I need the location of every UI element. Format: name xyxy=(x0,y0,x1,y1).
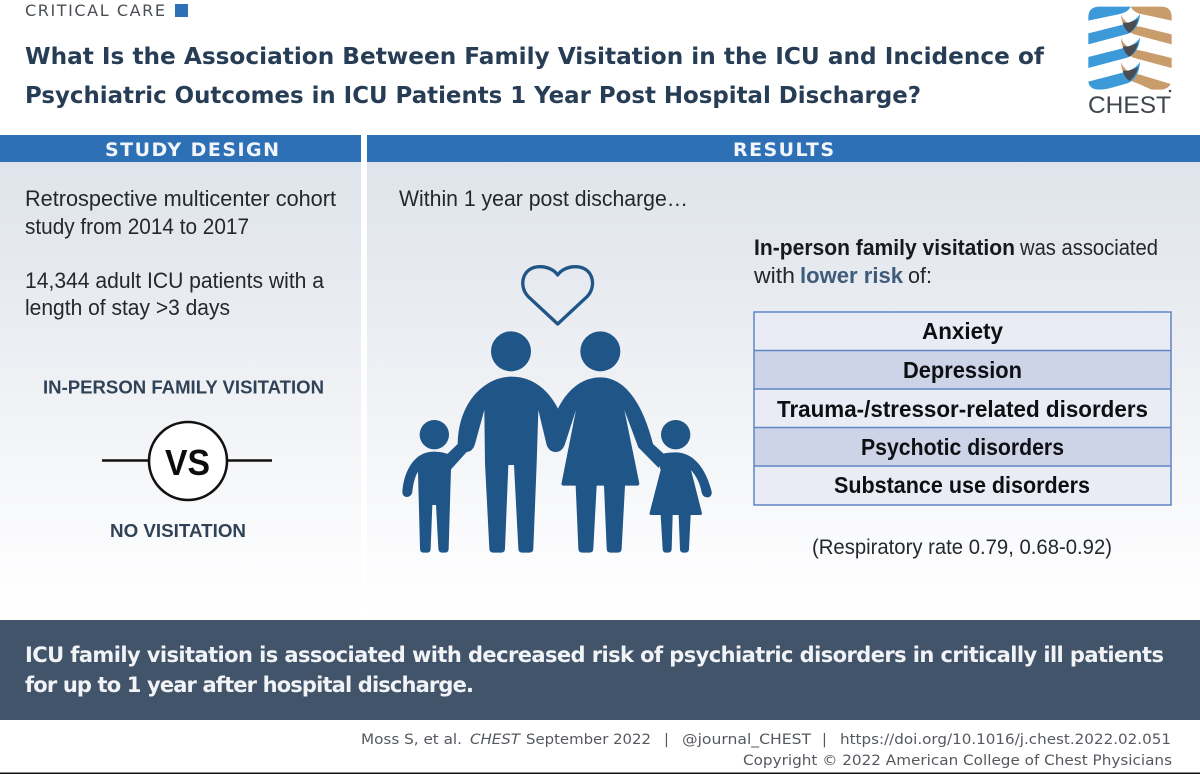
text: respiratory rate: (Respiratory rate 0.79, 0.68-0.92) xyxy=(812,536,1112,559)
text block: patients: 14,344 adult ICU patients with a xyxy=(25,268,325,293)
footer: citation: Moss S, et al. xyxy=(361,732,462,748)
text block: study type: Retrospective multicenter cohort xyxy=(25,186,336,211)
title: What Is the Association Between Family Visitation in the ICU and Incidence of xyxy=(25,42,1045,70)
icon: versus circle xyxy=(102,422,272,500)
text: within 1 year: Within 1 year post discharge… xyxy=(399,186,688,211)
footer: citation: | xyxy=(822,732,827,748)
icon: heart xyxy=(523,267,593,324)
icon: man and woman xyxy=(447,331,664,553)
icon: family with heart xyxy=(402,267,712,553)
icon: boy xyxy=(402,420,451,553)
footer: citation: @journal_CHEST xyxy=(682,732,811,748)
callout: conclusion: for up to 1 year after hospital discharge. xyxy=(25,673,474,697)
table: psychiatric outcomes: Substance use disorders xyxy=(834,472,1090,498)
text block: patients: length of stay >3 days xyxy=(25,295,230,320)
footer: citation: September 2022 xyxy=(526,732,651,748)
icon: versus circle: VS xyxy=(165,442,210,483)
callout: conclusion: ICU family visitation is associated with decreased risk of psychiatric disorders in critically ill patients xyxy=(25,643,1164,667)
icon: girl xyxy=(650,420,712,553)
panel: study design xyxy=(0,135,361,620)
text block: patients xyxy=(25,268,325,320)
text block: study type xyxy=(25,186,336,239)
footer: citation: | xyxy=(664,732,669,748)
heading: results: RESULTS xyxy=(733,139,834,161)
panel: results xyxy=(367,135,1200,620)
heading: study design xyxy=(0,135,361,162)
footer: citation xyxy=(361,732,1172,769)
label: in-person family visitation: IN-PERSON FAMILY VISITATION xyxy=(43,378,324,398)
footer: citation: CHEST xyxy=(470,732,521,748)
text: lower risk statement: with xyxy=(753,263,795,288)
title: Psychiatric Outcomes in ICU Patients 1 Year Post Hospital Discharge? xyxy=(25,81,921,109)
footer: citation: https://doi.org/10.1016/j.chest.2022.02.051 xyxy=(840,732,1171,748)
icon: CHEST logo: CHEST xyxy=(1088,92,1171,119)
text block: study type: study from 2014 to 2017 xyxy=(25,214,249,239)
heading: study design: STUDY DESIGN xyxy=(105,139,279,161)
table: psychiatric outcomes: Trauma-/stressor-related disorders xyxy=(777,396,1148,422)
table: psychiatric outcomes: Depression xyxy=(903,357,1022,383)
text: lower risk statement: was associated xyxy=(1019,235,1158,260)
text: lower risk statement xyxy=(753,235,1158,288)
text: lower risk statement: of: xyxy=(908,263,932,288)
icon: CHEST logo xyxy=(1088,7,1172,119)
title xyxy=(25,42,1045,109)
table: psychiatric outcomes xyxy=(754,312,1171,505)
label: no visitation: NO VISITATION xyxy=(110,521,246,541)
heading: results xyxy=(367,135,1200,162)
footer: citation: Copyright © 2022 American College of Chest Physicians xyxy=(743,753,1172,769)
text: lower risk statement: In-person family visitation xyxy=(754,235,1015,260)
text: lower risk statement: lower risk xyxy=(800,263,904,288)
callout: conclusion xyxy=(0,620,1200,720)
table: psychiatric outcomes: Anxiety xyxy=(922,318,1003,344)
section label: critical care: CRITICAL CARE xyxy=(25,1,165,20)
table: psychiatric outcomes: Psychotic disorders xyxy=(861,434,1064,460)
